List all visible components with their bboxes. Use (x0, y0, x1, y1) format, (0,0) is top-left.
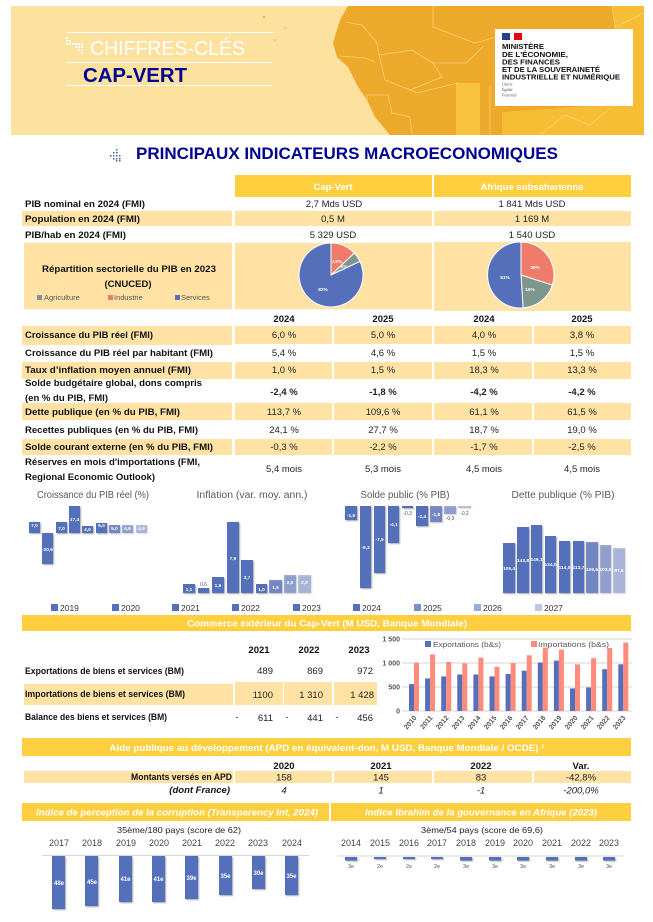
corruption rank labels (54, 871, 297, 887)
chart: croissance du PIB réel: 4,0 (84, 527, 91, 533)
row: exportations: 869 (307, 666, 323, 677)
row: recettes publiques: 24,1 % (269, 425, 299, 436)
corruption rank labels: 41e (120, 877, 131, 883)
row: PIB par habitant (25, 230, 555, 241)
ministry logo: MINISTÈRE (502, 42, 544, 51)
x axis years: 2014 (467, 715, 483, 731)
corruption header: Indice de perception de la corruption (Transparency Int, 2024) (36, 808, 318, 818)
row: réserves: 5,4 mois (266, 464, 302, 475)
corruption years: 2019 (116, 838, 136, 848)
row: PIB nominal: PIB nominal en 2024 (FMI) (25, 199, 145, 210)
chart: dette publique: 109,4 (503, 566, 515, 572)
pie legend: Industrie (114, 293, 143, 302)
chart: solde public (345, 490, 471, 588)
chart: dette publique: 109,6 (586, 567, 598, 573)
chart: solde public: Solde public (% PIB) (360, 490, 450, 501)
row: PIB nominal (25, 199, 566, 210)
row: importations: 1 428 (350, 690, 374, 701)
chart: exports and imports (382, 636, 632, 731)
row: balance: 611 (258, 713, 273, 724)
chart: solde public: -1,8 (432, 512, 440, 518)
pie chart: Afrique subsaharienne (488, 242, 554, 308)
ministry logo: Liberté (501, 82, 513, 86)
row: recettes publiques: 18,7 % (469, 425, 499, 436)
Ibrahim years: 2023 (599, 838, 619, 848)
chart: inflation: 7,9 (230, 556, 237, 562)
Ibrahim header (331, 803, 631, 821)
chart: croissance du PIB réel: 4,9 (138, 526, 145, 532)
aid years: Var. (573, 761, 589, 772)
icon: pixel stairs (66, 37, 83, 54)
chart legend (425, 640, 610, 649)
row: balance: - (235, 712, 239, 723)
row: inflation: 18,3 % (469, 365, 499, 376)
Ibrahim rank subtitle: 3ème/54 pays (score de 69,6) (421, 825, 543, 835)
chart: solde public: -0,9 (446, 516, 455, 522)
row: solde courant (22, 439, 631, 455)
Ibrahim rank labels: 2e (434, 864, 440, 870)
charts year legend: 2024 (362, 603, 381, 613)
pie legend: Services (181, 293, 210, 302)
row: solde courant: -2,5 % (568, 442, 596, 453)
section header: aide publique: Aide publique au développement (APD en équivalent-don, M USD, Banque Mondiale / OCDE) ¹ (110, 743, 544, 754)
row: inflation (22, 362, 631, 379)
table column headers: Cap-Vert (313, 182, 353, 193)
x axis years: 2018 (532, 715, 548, 731)
chart: exports and imports: 0 (396, 708, 400, 716)
section header: commerce extérieur (22, 615, 631, 631)
section header: commerce extérieur: Commerce extérieur du Cap-Vert (M USD, Banque Mondiale) (187, 618, 467, 630)
Ibrahim rank labels: 3e (492, 864, 498, 870)
row: PIB nominal: 2,7 Mds USD (306, 199, 362, 210)
row: montants APD: 145 (373, 772, 389, 784)
chart: croissance du PIB réel (29, 490, 149, 564)
corruption rank subtitle: 35ème/180 pays (score de 62) (117, 825, 241, 835)
row: solde budgétaire: (en % du PIB, FMI) (25, 393, 108, 404)
row: solde budgétaire: Solde budgétaire global, dons compris (25, 378, 202, 389)
row: croissance par habitant: Croissance du PIB réel par habitant (FMI) (25, 348, 213, 359)
pie chart: Afrique subsaharienne: 51% (500, 275, 511, 281)
corruption years: 2023 (248, 838, 268, 848)
row: réserves: Regional Economic Outlook) (25, 472, 155, 483)
row: solde courant: -1,7 % (470, 442, 498, 453)
row: exportations (25, 666, 373, 677)
pie chart: Cap-Vert (299, 243, 363, 307)
export bars (409, 661, 623, 711)
row: PIB par habitant: 5 329 USD (310, 230, 356, 241)
year headers: 2025 (571, 314, 593, 325)
Ibrahim years: 2017 (427, 838, 447, 848)
Ibrahim rank labels: 3e (578, 864, 584, 870)
row: croissance par habitant: 1,5 % (472, 348, 497, 359)
ministry logo: DE L'ÉCONOMIE, (502, 50, 568, 59)
x axis years: 2020 (564, 715, 580, 731)
chart: solde public: -2,4 (418, 514, 426, 520)
x axis years: 2022 (596, 715, 612, 731)
row: solde courant: -0,3 % (270, 442, 298, 453)
row: population: Population en 2024 (FMI) (25, 214, 140, 225)
chart: dette publique: 113,7 (573, 565, 585, 571)
year headers (273, 314, 593, 325)
chart: solde public: -0,2 (460, 511, 469, 517)
aid years: 2020 (273, 761, 295, 772)
row: dont France: -1 (477, 786, 485, 796)
chart: croissance du PIB réel: 7,0 (58, 526, 65, 532)
charts year legend: 2023 (302, 603, 321, 613)
chart: croissance du PIB réel: Croissance du PIB réel (%) (37, 490, 149, 501)
ministry logo: DES FINANCES (502, 58, 560, 66)
row: population (22, 211, 631, 226)
corruption years: 2022 (215, 838, 235, 848)
chart: inflation: 1,5 (272, 585, 279, 591)
row: recettes publiques (25, 425, 597, 436)
chart: dette publique: 97,6 (614, 568, 624, 574)
chart legend: Exportations (b&s) (433, 640, 502, 649)
row: montants APD: -42,8% (566, 772, 597, 784)
row: balance (25, 712, 373, 724)
pie chart: Cap-Vert: 13% (332, 259, 343, 265)
x axis years: 2016 (499, 715, 515, 731)
row: croissance PIB réel: 6,0 % (272, 330, 297, 341)
row: croissance par habitant (25, 348, 595, 359)
row: dette publique (22, 403, 631, 420)
chart: inflation (183, 490, 311, 593)
panel: corruption index (22, 803, 329, 909)
corruption years: 2024 (282, 838, 302, 848)
trade years: 2023 (348, 645, 370, 656)
aid table (24, 761, 631, 796)
section heading: PRINCIPAUX INDICATEURS MACROECONOMIQUES (136, 145, 558, 163)
row: dette publique: 109,6 % (366, 407, 401, 418)
banner heading: CHIFFRES-CLÉS (90, 37, 245, 60)
chart: dette publique: 103,9 (599, 567, 612, 573)
charts year legend: 2021 (181, 603, 200, 613)
chart: exports and imports: 500 (388, 684, 400, 692)
chart: inflation: 2,0 (301, 580, 308, 586)
indicators table (22, 175, 631, 483)
chart: inflation: 2,0 (287, 580, 294, 586)
year headers: 2024 (473, 314, 495, 325)
chart: dette publique: 149,1 (530, 557, 543, 563)
row: balance: Balance des biens et services (BM) (25, 712, 167, 723)
pie chart: Cap-Vert: 5% (341, 264, 348, 270)
chart: dette publique: 143,8 (517, 558, 529, 564)
Ibrahim years: 2018 (456, 838, 476, 848)
aid years (273, 761, 589, 772)
row: dette publique: 61,1 % (469, 407, 499, 418)
source label: (CNUCED) (105, 279, 151, 290)
charts year legend: 2022 (241, 603, 260, 613)
row: réserves: 4,5 mois (466, 464, 502, 475)
chart: croissance du PIB réel: -20,6 (42, 547, 53, 553)
chart: dette publique: 134,0 (544, 562, 557, 568)
row: balance: 441 (307, 713, 323, 724)
ministry logo: INDUSTRIELLE ET NUMÉRIQUE (502, 72, 620, 82)
corruption years: 2020 (149, 838, 169, 848)
corruption rank labels: 41e (153, 877, 164, 883)
Ibrahim rank labels: 3e (606, 864, 612, 870)
corruption rank labels: 48e (54, 881, 65, 887)
row: dette publique: 61,5 % (567, 407, 597, 418)
corruption rank labels: 30e (253, 871, 264, 877)
Ibrahim header: Indice Ibrahim de la gouvernance en Afrique (2023) (365, 808, 597, 818)
x axis years: 2017 (515, 715, 531, 731)
chart: solde public: -1,6 (347, 513, 355, 519)
Ibrahim rank labels: 3e (348, 864, 354, 870)
pie chart: Afrique subsaharienne: 30% (530, 265, 541, 271)
Ibrahim years: 2016 (399, 838, 419, 848)
Ibrahim rank bars (345, 857, 615, 860)
row: dont France (169, 785, 599, 796)
row: balance: 456 (357, 713, 373, 724)
row: réserves: Réserves en mois d'importations (FMI, (25, 457, 200, 468)
corruption rank labels: 35e (286, 874, 297, 880)
corruption rank labels: 39e (186, 876, 197, 882)
trade years: 2022 (298, 645, 320, 656)
row: croissance PIB réel: 4,0 % (472, 330, 497, 341)
corruption rank labels: 35e (220, 874, 231, 880)
row: PIB par habitant: 1 540 USD (509, 230, 555, 241)
Ibrahim years (341, 838, 619, 848)
chart legend: Importations (b&s) (538, 640, 610, 649)
row: croissance par habitant: 5,4 % (272, 348, 297, 359)
row: population: 1 169 M (515, 214, 549, 225)
row: balance: - (285, 712, 289, 723)
chart: croissance du PIB réel: 5,0 (111, 526, 118, 532)
year headers: 2025 (372, 314, 394, 325)
Ibrahim rank labels: 3e (520, 864, 526, 870)
Ibrahim years: 2022 (571, 838, 591, 848)
row: solde budgétaire: -4,2 % (568, 387, 596, 398)
row: dette publique: 113,7 % (267, 407, 302, 418)
section header: aide publique (22, 738, 631, 756)
row: dont France: -200,0% (563, 786, 599, 796)
map of West Africa (263, 6, 644, 135)
corruption rank labels: 45e (87, 880, 98, 886)
row: solde courant: -2,2 % (369, 442, 397, 453)
aid years: 2021 (370, 761, 392, 772)
Ibrahim years: 2020 (513, 838, 533, 848)
sector breakdown label: Répartition sectorielle du PIB en 2023 (42, 264, 216, 275)
row: importations: 1 310 (299, 690, 323, 701)
row: solde budgétaire (25, 378, 596, 404)
chart: inflation: Inflation (var. moy. ann.) (196, 490, 308, 501)
charts year legend (51, 603, 563, 613)
year headers: 2024 (273, 314, 295, 325)
ministry logo (495, 29, 633, 106)
table column headers (235, 175, 631, 197)
row: recettes publiques: Recettes publiques (en % du PIB, FMI) (25, 425, 198, 436)
Ibrahim years: 2019 (485, 838, 505, 848)
charts year legend: 2026 (483, 603, 502, 613)
chart: inflation: 3,7 (244, 575, 251, 581)
trade years: 2021 (248, 645, 270, 656)
table column headers: Afrique subsaharienne (480, 182, 584, 193)
Ibrahim rank labels (348, 864, 612, 870)
charts year legend: 2025 (423, 603, 442, 613)
chart: inflation: 0,6 (200, 582, 207, 588)
row: croissance PIB réel (22, 326, 631, 345)
row: croissance PIB réel: Croissance du PIB réel (FMI) (25, 330, 153, 341)
chart: solde public: -7,5 (375, 537, 384, 543)
Ibrahim years: 2021 (542, 838, 562, 848)
chart: inflation: 1,1 (186, 587, 193, 593)
pie chart: Cap-Vert: 82% (318, 287, 329, 293)
row: dont France: (dont France) (169, 785, 230, 796)
row: importations (24, 682, 377, 705)
Ibrahim rank labels: 2e (377, 864, 383, 870)
chart: dette publique: Dette publique (% PIB) (512, 490, 614, 501)
chart: solde public: -9,3 (361, 545, 370, 551)
banner title block (66, 32, 274, 87)
x axis years: 2015 (483, 715, 499, 731)
country name: CAP-VERT (83, 65, 187, 87)
Ibrahim years: 2015 (370, 838, 390, 848)
row: réserves: 4,5 mois (564, 464, 600, 475)
x axis years: 2010 (403, 715, 419, 731)
row: exportations: Exportations de biens et services (BM) (25, 666, 184, 677)
row: PIB nominal: 1 841 Mds USD (498, 199, 566, 210)
chart: inflation: 1,0 (258, 587, 265, 593)
icon: french flag (502, 33, 522, 40)
Ibrahim years: 2014 (341, 838, 361, 848)
row: dont France: 4 (281, 786, 287, 796)
corruption rank bars (52, 856, 298, 909)
chart: dette publique (503, 490, 625, 593)
chart: solde public: -0,3 (403, 511, 412, 517)
header banner (11, 6, 644, 135)
corruption header (22, 803, 329, 821)
x axis years: 2013 (451, 715, 467, 731)
row: importations: Importations de biens et services (BM) (25, 689, 185, 700)
Ibrahim rank labels: 2e (406, 864, 412, 870)
import bars (414, 642, 628, 711)
row: dette publique: Dette publique (en % du PIB, FMI) (25, 407, 180, 418)
x axis years: 2019 (548, 715, 564, 731)
row: solde budgétaire: -2,4 % (270, 387, 298, 398)
pie legend (37, 293, 210, 302)
x axis years: 2012 (435, 715, 451, 731)
chart: croissance du PIB réel: 6,0 (98, 523, 105, 529)
row: inflation: 1,5 % (371, 365, 396, 376)
row: réserves: 5,3 mois (365, 464, 401, 475)
row: solde courant: Solde courant externe (en % du PIB, FMI) (25, 442, 213, 453)
trade years (248, 645, 370, 656)
charts year legend: 2027 (544, 603, 563, 613)
pie legend: Agriculture (44, 293, 80, 302)
chart: exports and imports: 1 000 (382, 660, 400, 668)
row: recettes publiques: 19,0 % (567, 425, 597, 436)
ministry logo: ET DE LA SOUVERAINETÉ (502, 65, 600, 74)
pie chart: Afrique subsaharienne: 19% (525, 287, 536, 293)
corruption years: 2018 (82, 838, 102, 848)
x axis years: 2021 (580, 715, 596, 731)
panel: Ibrahim index (331, 803, 631, 870)
chart: exports and imports: 1 500 (382, 636, 400, 644)
row: montants APD: Montants versés en APD (131, 772, 232, 783)
row: solde budgétaire: -4,2 % (470, 387, 498, 398)
row: montants APD (24, 771, 631, 784)
icon: heading pixels (110, 149, 120, 162)
Ibrahim rank labels: 3e (549, 864, 555, 870)
row: inflation: 1,0 % (272, 365, 297, 376)
trade table (24, 645, 377, 724)
row: solde budgétaire: -1,8 % (369, 387, 397, 398)
row: inflation: Taux d’inflation moyen annuel (FMI) (25, 365, 191, 376)
chart: croissance du PIB réel: 7,0 (31, 523, 38, 529)
row: croissance PIB réel: 5,0 % (371, 330, 396, 341)
row: PIB par habitant: PIB/hab en 2024 (FMI) (25, 230, 126, 241)
ministry logo: Fraternité (501, 94, 517, 98)
row: recettes publiques: 27,7 % (368, 425, 398, 436)
corruption years (49, 838, 302, 848)
row: croissance par habitant: 4,6 % (371, 348, 396, 359)
x axis years: 2011 (419, 715, 435, 731)
row: sector breakdown (24, 242, 631, 311)
charts year legend: 2020 (121, 603, 140, 613)
chart: croissance du PIB réel: 17,4 (70, 517, 79, 523)
corruption years: 2017 (49, 838, 69, 848)
row: dont France: 1 (378, 786, 384, 796)
aid years: 2022 (470, 761, 492, 772)
chart: solde public: -4,1 (389, 522, 398, 528)
row: importations: 1100 (253, 690, 273, 701)
row: montants APD: 83 (476, 772, 486, 784)
Ibrahim rank labels: 3e (463, 864, 469, 870)
row: croissance par habitant: 1,5 % (570, 348, 595, 359)
row: réserves (25, 457, 600, 483)
row: exportations: 972 (357, 666, 373, 677)
corruption years: 2021 (182, 838, 202, 848)
x axis years: 2023 (612, 715, 628, 731)
chart: croissance du PIB réel: 4,9 (124, 526, 131, 532)
ministry logo: Égalité (501, 87, 513, 92)
x axis years (403, 715, 628, 731)
row: population: 0,5 M (321, 214, 345, 225)
row: inflation: 13,3 % (567, 365, 597, 376)
row: montants APD: 158 (276, 772, 292, 784)
row: balance: - (335, 712, 339, 723)
row: exportations: 489 (257, 666, 273, 677)
charts year legend: 2019 (60, 603, 79, 613)
chart: inflation: 1,9 (215, 583, 222, 589)
row: croissance PIB réel: 3,8 % (570, 330, 595, 341)
chart: dette publique: 114,0 (559, 565, 571, 571)
